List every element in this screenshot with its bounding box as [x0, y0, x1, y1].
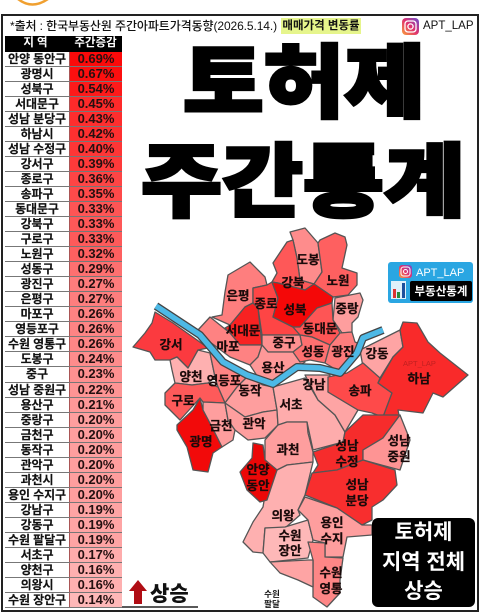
ranking table: 0.33%	[78, 201, 114, 216]
district labels: 중구	[272, 336, 296, 350]
legend text: 상승	[150, 583, 189, 606]
district labels: 강동	[365, 347, 389, 361]
ranking table: 0.21%	[78, 397, 114, 412]
ranking table: 0.43%	[78, 111, 114, 126]
district labels: 동대문	[303, 322, 337, 336]
district labels: 서초	[279, 398, 303, 412]
ranking table: 0.19%	[78, 502, 114, 517]
ranking table: 영등포구	[15, 322, 59, 336]
ranking table: 광진구	[21, 277, 53, 291]
ranking table: 수원 팔달구	[8, 533, 66, 547]
ranking table	[5, 36, 122, 608]
district: 성남 중원	[363, 415, 410, 470]
ranking table: 0.36%	[78, 171, 114, 186]
callout: all regions up: 토허제	[395, 521, 452, 544]
district labels: 강남	[302, 378, 326, 392]
ranking table: 의왕시	[21, 578, 53, 592]
district: 서초	[273, 378, 345, 450]
ranking table: 강북구	[21, 217, 53, 231]
ranking table: 0.26%	[78, 306, 114, 321]
ranking table: 성남 중원구	[8, 383, 66, 397]
district labels	[159, 253, 431, 596]
ranking table: 관악구	[21, 458, 53, 472]
district: 하남	[378, 322, 468, 420]
district labels: 영통	[319, 582, 343, 596]
ranking table: 0.16%	[78, 577, 114, 592]
district labels: 관악	[242, 417, 266, 431]
district labels: 분당	[345, 494, 369, 508]
district: 성남 수정	[313, 415, 400, 473]
district: 성동	[293, 335, 330, 363]
ranking table: 중랑구	[21, 413, 53, 427]
district: 광명	[177, 398, 222, 472]
label: 수원 팔달: 팔달	[264, 599, 280, 609]
title line 2: 주간통계	[141, 138, 465, 226]
ranking table: 금천구	[21, 428, 53, 442]
district: 송파	[328, 363, 392, 417]
district: 강동	[360, 330, 403, 378]
ranking table: 과천시	[21, 473, 53, 487]
district: 용산	[250, 345, 305, 385]
district labels: 용인	[320, 516, 344, 530]
ranking table: 0.20%	[78, 427, 114, 442]
ranking table: 구로구	[21, 232, 53, 246]
ranking table: 0.33%	[78, 231, 114, 246]
ranking table: 서대문구	[15, 97, 59, 111]
district: 마포	[198, 317, 262, 365]
district labels: 양천	[179, 370, 203, 384]
district: 수원 영통	[308, 542, 343, 607]
ranking table: 0.27%	[78, 276, 114, 291]
district: 노원	[314, 233, 357, 297]
district: 과천	[265, 422, 313, 470]
highlighted subtitle: 매매가격 변동률	[282, 20, 360, 32]
source line: *출처 : 한국부동산원 주간아파트가격동향(2026.5.14.)	[10, 19, 277, 33]
ranking table: 0.23%	[78, 366, 114, 381]
district: 양천	[170, 350, 215, 385]
district labels: 안양	[246, 463, 270, 477]
icon: instagram	[402, 18, 419, 35]
ranking table: 용인 수지구	[8, 488, 66, 502]
district: 성남 분당	[305, 460, 397, 525]
ranking table: 지역	[23, 37, 51, 49]
district labels: 마포	[216, 340, 240, 354]
ranking table: 안양 동안구	[8, 52, 66, 66]
district: 서대문	[225, 303, 262, 345]
callout: all regions up	[372, 518, 475, 607]
watermark: APT_LAP	[403, 359, 436, 368]
ranking table: 0.54%	[78, 81, 114, 96]
ranking table: 0.20%	[78, 457, 114, 472]
district labels: 송파	[348, 384, 372, 398]
district: 용인 수지	[298, 497, 372, 557]
callout: all regions up: 지역 전체	[382, 550, 465, 574]
ranking table: 성남 분당구	[8, 112, 66, 126]
ranking table: 0.67%	[78, 66, 114, 81]
ranking table: 0.17%	[78, 547, 114, 562]
label: 수원 팔달: 수원	[264, 589, 280, 599]
ranking table: 용산구	[21, 398, 53, 412]
district labels: 동안	[246, 479, 270, 493]
district labels: 광진	[331, 345, 355, 359]
callout: all regions up: 상승	[404, 580, 443, 603]
district labels: 광명	[189, 435, 213, 449]
icon: up arrow	[129, 580, 147, 604]
district: 강북	[272, 240, 314, 290]
district: 광진	[325, 332, 360, 372]
ranking table: 도봉구	[21, 352, 53, 366]
district labels: 중원	[387, 450, 411, 464]
ranking table: 0.20%	[78, 442, 114, 457]
ranking table: 0.19%	[78, 517, 114, 532]
district: 수원 팔달	[270, 560, 313, 587]
ranking table: 0.69%	[78, 50, 114, 66]
badge: real estate stats	[388, 262, 473, 303]
district labels: 영등포	[207, 374, 241, 388]
district labels: 구로	[171, 394, 195, 408]
district labels: 금천	[209, 419, 233, 433]
district labels: 중랑	[335, 302, 359, 316]
ranking table: 0.16%	[78, 562, 114, 577]
ranking table: 0.40%	[78, 141, 114, 156]
district: 의왕	[243, 462, 313, 553]
ranking table: 0.26%	[78, 336, 114, 351]
district labels: 노원	[326, 274, 350, 288]
district labels: 성남	[335, 439, 359, 453]
badge icon: bar chart	[391, 281, 406, 299]
ranking table: 0.22%	[78, 382, 114, 397]
ranking table: 0.32%	[78, 246, 114, 261]
district labels: 과천	[276, 442, 300, 457]
district labels: 성남	[387, 434, 411, 448]
district: 도봉	[290, 228, 322, 284]
district: 종로	[253, 282, 300, 335]
legend: rising	[122, 580, 198, 608]
title line 1: 토허제	[183, 39, 425, 128]
ranking table: 성남 수정구	[8, 142, 66, 156]
ranking table: 종로구	[21, 172, 53, 186]
district labels: 성동	[301, 345, 325, 359]
district labels: 도봉	[296, 253, 320, 267]
ranking table: 0.19%	[78, 532, 114, 547]
ranking table: 동대문구	[15, 202, 59, 216]
district: 강서	[133, 312, 208, 368]
ranking table: 양천구	[21, 563, 53, 577]
badge icon: instagram	[399, 265, 412, 278]
logo fragment at top	[17, 0, 49, 6]
ranking table: 0.45%	[78, 96, 114, 111]
district labels: 성남	[345, 478, 369, 492]
district labels: 강북	[281, 276, 305, 290]
district labels: 용산	[261, 361, 285, 375]
ranking table: 노원구	[21, 247, 53, 261]
district: 안양 동안	[240, 443, 277, 502]
district: 동작	[225, 377, 277, 417]
district labels: 동작	[238, 384, 262, 398]
ranking table: 0.14%	[78, 592, 114, 607]
ranking table: 0.20%	[78, 472, 114, 487]
district: 은평	[212, 262, 267, 325]
ranking table: 서초구	[21, 548, 53, 562]
district labels: 수원	[278, 529, 302, 543]
district labels: 은평	[226, 289, 250, 303]
district labels: 하남	[407, 372, 431, 386]
district: 금천	[203, 402, 235, 447]
ranking table: 주간증감	[74, 37, 117, 49]
district: 구로	[165, 383, 225, 420]
river: Han	[156, 306, 383, 384]
ranking table: 강남구	[21, 503, 53, 517]
district labels: 성북	[283, 303, 307, 317]
ranking table: 0.20%	[78, 412, 114, 427]
district labels: 강서	[159, 338, 183, 352]
ranking table: 0.26%	[78, 321, 114, 336]
ranking table: 0.20%	[78, 487, 114, 502]
ranking table: 강서구	[21, 157, 53, 171]
ranking table: 0.39%	[78, 156, 114, 171]
ranking table: 강동구	[21, 518, 53, 532]
district labels: 수원	[319, 566, 343, 580]
ranking table: 중구	[26, 367, 48, 381]
ranking table: 동작구	[21, 443, 53, 457]
ranking table: 은평구	[21, 292, 53, 306]
account handle: APT_LAP	[423, 20, 474, 32]
district: 수원 장안	[263, 520, 313, 562]
district: 관악	[225, 403, 278, 440]
district labels: 의왕	[271, 509, 295, 523]
district: 강남	[305, 375, 358, 432]
ranking table: 수원 장안구	[8, 593, 66, 607]
badge handle: APT_LAP	[416, 267, 464, 279]
ranking table: 성북구	[21, 82, 53, 96]
district labels: 종로	[254, 297, 278, 311]
ranking table: 광명시	[21, 67, 53, 81]
district labels: 장안	[278, 544, 302, 558]
ranking table: 수원 영통구	[8, 337, 66, 351]
ranking table: 0.24%	[78, 351, 114, 366]
ranking table: 0.27%	[78, 291, 114, 306]
district: 영등포	[210, 348, 247, 403]
district: 성북	[272, 282, 333, 327]
main title	[141, 39, 465, 226]
ranking table: 0.33%	[78, 216, 114, 231]
ranking table: 0.29%	[78, 261, 114, 276]
district: 중구	[262, 335, 302, 352]
ranking table: 하남시	[21, 127, 53, 141]
badge label: 부동산통계	[415, 284, 467, 298]
district labels: 수지	[320, 532, 344, 546]
ranking table: 0.42%	[78, 126, 114, 141]
district: 중랑	[333, 293, 363, 333]
ranking table: 송파구	[21, 187, 53, 201]
district labels: 수정	[335, 455, 359, 469]
district labels: 서대문	[226, 324, 260, 338]
ranking table: 0.35%	[78, 186, 114, 201]
ranking table: 성동구	[21, 262, 53, 276]
district: 동대문	[293, 303, 340, 345]
label: 수원 팔달	[264, 589, 280, 609]
ranking table: 마포구	[21, 307, 53, 321]
